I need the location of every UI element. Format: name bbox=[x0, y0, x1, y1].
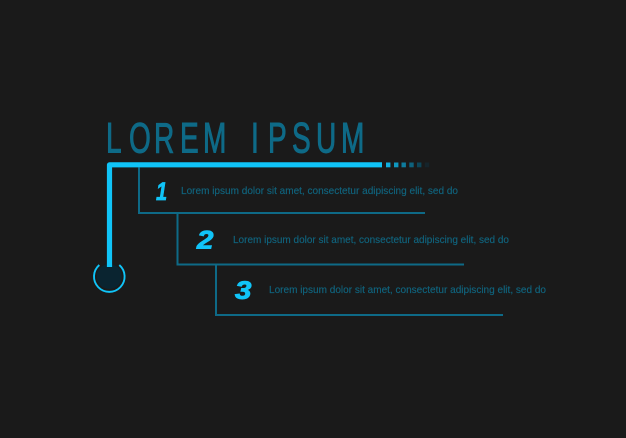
fading dotted line bbox=[386, 162, 429, 167]
item 3 number: 3 bbox=[235, 276, 251, 304]
panel: item 2 bbox=[178, 214, 509, 264]
title: S bbox=[292, 114, 311, 162]
title bbox=[106, 114, 364, 162]
icon: node circle bbox=[94, 264, 125, 292]
title: M bbox=[203, 114, 226, 162]
title: U bbox=[316, 114, 336, 162]
item 3 text: Lorem ipsum dolor sit amet, consectetur adipiscing elit, sed do bbox=[269, 285, 546, 296]
title: L bbox=[106, 114, 122, 162]
title: M bbox=[341, 114, 364, 162]
item 2 text: Lorem ipsum dolor sit amet, consectetur adipiscing elit, sed do bbox=[233, 235, 509, 246]
item 2 number: 2 bbox=[196, 226, 213, 254]
title: E bbox=[180, 114, 199, 162]
title: O bbox=[129, 114, 151, 162]
item 1 bracket bbox=[139, 168, 425, 213]
title: R bbox=[154, 114, 174, 162]
item 1 text: Lorem ipsum dolor sit amet, consectetur adipiscing elit, sed do bbox=[181, 186, 458, 197]
item 3 bracket bbox=[216, 266, 503, 315]
item 2 bracket bbox=[178, 214, 464, 264]
item 1 number: 1 bbox=[156, 178, 167, 206]
title: P bbox=[268, 114, 287, 162]
main connector line with node bbox=[94, 165, 382, 292]
panel: item 1 bbox=[139, 168, 458, 213]
title: I bbox=[251, 114, 259, 162]
panel: item 3 bbox=[216, 266, 546, 315]
